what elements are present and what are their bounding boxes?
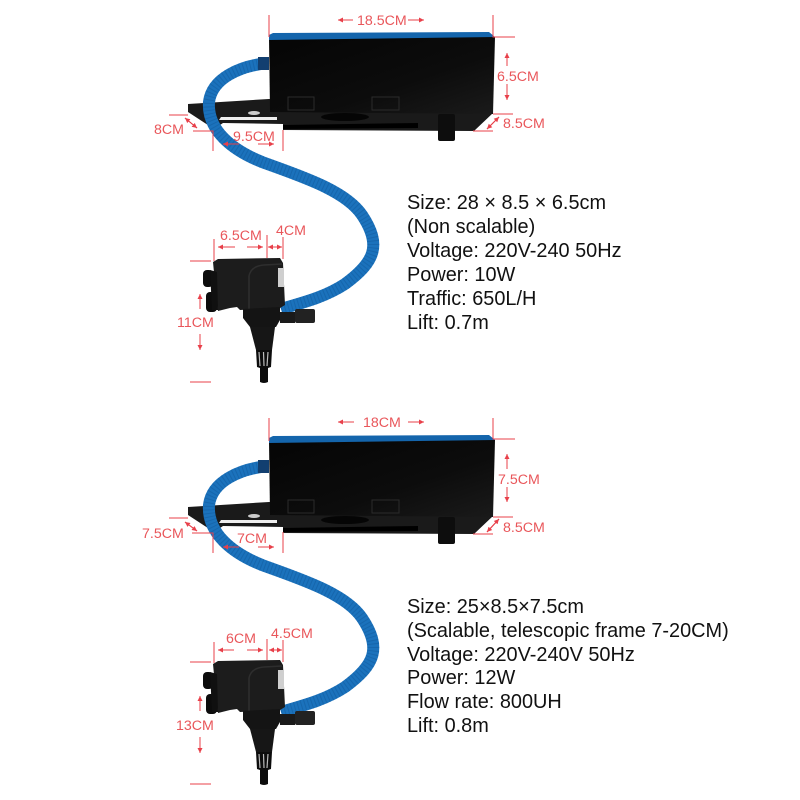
dimension labels: 8CM [154, 122, 184, 138]
dimension labels: 6CM [226, 631, 256, 647]
dimension labels [154, 13, 545, 331]
dimension labels: 11CM [177, 315, 214, 331]
text block: product two specifications: Lift: 0.8m [407, 715, 489, 737]
text block: product two specifications: Size: 25×8.5×7.5cm [407, 596, 584, 618]
dimension labels: 18.5CM [357, 13, 407, 29]
text block: product one specifications [407, 192, 622, 334]
filter box with bracket [188, 435, 495, 544]
text block: product one specifications: Traffic: 650L/H [407, 288, 536, 310]
submersible pump [203, 660, 315, 785]
filter box with bracket [188, 32, 495, 141]
text block: product one specifications: Power: 10W [407, 264, 516, 286]
text block: product one specifications: Voltage: 220V-240 50Hz [407, 240, 622, 262]
text block: product one specifications: Lift: 0.7m [407, 312, 489, 334]
dimension labels: 4CM [276, 223, 306, 239]
dimension labels [142, 415, 545, 734]
dimension labels: 7CM [237, 531, 267, 547]
panel: product two, 800L/H filter pump [142, 415, 545, 785]
text block: product two specifications: Flow rate: 800UH [407, 691, 562, 713]
corrugated blue hose [209, 57, 373, 309]
dimension labels: 4.5CM [271, 626, 313, 642]
dimension labels: 7.5CM [498, 472, 540, 488]
text block: product one specifications: Size: 28 × 8.5 × 6.5cm [407, 192, 606, 214]
text block: product two specifications: (Scalable, telescopic frame 7-20CM) [407, 620, 729, 642]
dimension lines [169, 418, 515, 784]
panel: product one, 650L/H filter pump [154, 13, 545, 383]
text block: product one specifications: (Non scalable) [407, 216, 535, 238]
dimension labels: 9.5CM [233, 129, 275, 145]
dimension labels: 6.5CM [220, 228, 262, 244]
text block: product two specifications: Voltage: 220V-240V 50Hz [407, 644, 635, 666]
dimension labels: 6.5CM [497, 69, 539, 85]
text block: product two specifications [407, 596, 729, 737]
text block: product two specifications: Power: 12W [407, 667, 516, 689]
dimension labels: 7.5CM [142, 526, 184, 542]
submersible pump [203, 258, 315, 383]
dimension labels: 13CM [176, 718, 214, 734]
dimension labels: 8.5CM [503, 520, 545, 536]
corrugated blue hose [209, 460, 373, 712]
dimension labels: 8.5CM [503, 116, 545, 132]
dimension labels: 18CM [363, 415, 401, 431]
dimension lines [169, 15, 515, 382]
